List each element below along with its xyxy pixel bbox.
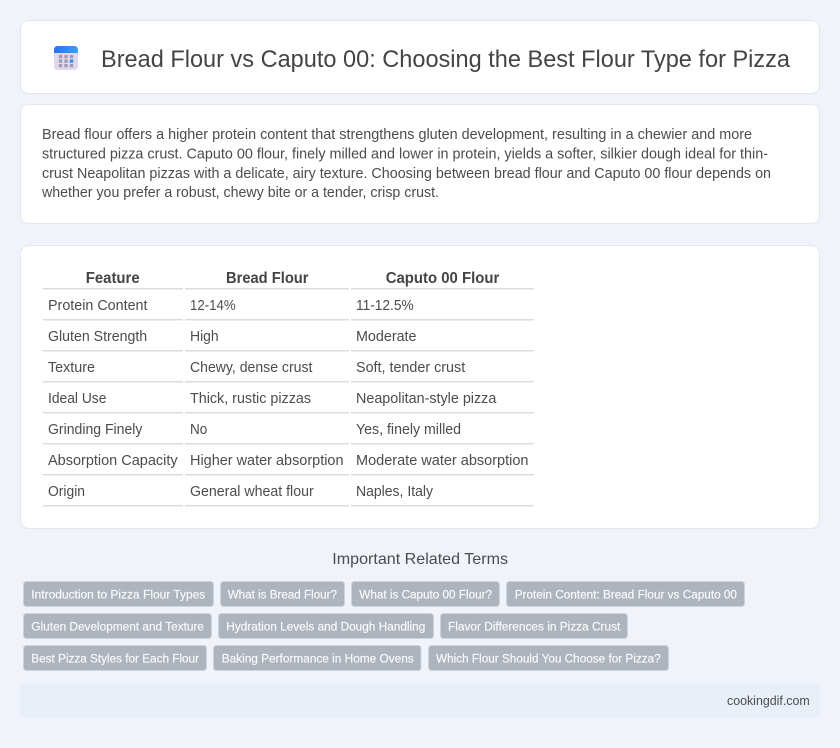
text block: introduction paragraph: [41, 127, 771, 201]
tag: which flour should you choose: [428, 646, 668, 670]
table header: [86, 270, 499, 287]
text block: introduction paragraph: crust Neapolitan pizzas with a delicate, airy texture. Choosing between bread flour and Caputo 00 flour depends on: [42, 166, 771, 182]
icon: calendar: [54, 46, 78, 70]
table row: ideal use: [48, 391, 496, 407]
text block: introduction paragraph: whether you prefer a robust, chewy bite or a tender, crisp crust.: [41, 185, 439, 201]
table row: texture: [48, 360, 465, 376]
panel: title card: [20, 20, 820, 94]
table row: gluten strength: High: [190, 329, 219, 345]
text block: introduction paragraph: structured pizza crust. Caputo 00 flour, finely milled and lower in protein, yields a softer, silkier dough ideal for thin-: [42, 146, 768, 162]
tag: baking performance in home ovens: Baking Performance in Home Ovens: [222, 651, 414, 665]
text block: introduction paragraph: Bread flour offers a higher protein content that strengthens gluten development, resulting in a chewier and more: [42, 127, 752, 143]
table row: absorption capacity: Moderate water absorption: [356, 453, 528, 469]
table row: origin: General wheat flour: [190, 484, 314, 500]
table row: origin: Origin: [48, 484, 85, 500]
panel: comparison table: [20, 246, 820, 528]
table header: Caputo 00 Flour: [386, 270, 499, 287]
table header: Feature: [86, 270, 140, 287]
tag: hydration levels and dough handling: Hydration Levels and Dough Handling: [226, 619, 425, 633]
tag: introduction to pizza flour types: [24, 582, 214, 606]
tag: which flour should you choose: Which Flour Should You Choose for Pizza?: [436, 651, 661, 665]
table row: texture: Soft, tender crust: [356, 360, 465, 376]
table row: grinding finely: No: [190, 422, 207, 438]
table row: ideal use: Thick, rustic pizzas: [190, 391, 311, 407]
table row: texture: Texture: [48, 360, 95, 376]
tag: what is caputo 00 flour: What is Caputo 00 Flour?: [359, 587, 492, 601]
tag: baking performance in home ovens: [214, 646, 421, 670]
tag: best pizza styles for each flour: [24, 646, 206, 670]
tag: what is bread flour: What is Bread Flour?: [228, 587, 337, 601]
table row: protein content: 11-12.5%: [356, 298, 414, 314]
table row: gluten strength: [48, 329, 416, 345]
tag: hydration levels and dough handling: [218, 614, 434, 638]
footer: [20, 684, 820, 718]
tag: what is bread flour: [220, 582, 344, 606]
tag: best pizza styles for each flour: Best Pizza Styles for Each Flour: [31, 651, 199, 665]
table row: protein content: Protein Content: [48, 298, 148, 314]
heading: important related terms: Important Related Terms: [332, 551, 508, 568]
tag: what is caputo 00 flour: [352, 582, 500, 606]
table row: absorption capacity: Absorption Capacity: [48, 453, 178, 469]
table row: grinding finely: Yes, finely milled: [356, 422, 461, 438]
table row: protein content: [48, 298, 414, 314]
table row: gluten strength: Gluten Strength: [48, 329, 147, 345]
table row: protein content: 12-14%: [190, 298, 236, 314]
tag: gluten development and texture: [24, 614, 212, 638]
table row: ideal use: Ideal Use: [48, 391, 106, 407]
related terms tags: [24, 582, 744, 670]
table row: absorption capacity: [48, 453, 528, 469]
table row: ideal use: Neapolitan-style pizza: [356, 391, 496, 407]
tag: flavor differences in pizza crust: [440, 614, 628, 638]
tag: flavor differences in pizza crust: Flavor Differences in Pizza Crust: [448, 619, 621, 633]
table row: grinding finely: [48, 422, 461, 438]
table row: absorption capacity: Higher water absorption: [190, 453, 344, 469]
table row: gluten strength: Moderate: [356, 329, 416, 345]
title: Bread Flour vs Caputo 00: Choosing the Best Flour Type for Pizza: [101, 46, 791, 73]
tag: introduction to pizza flour types: Introduction to Pizza Flour Types: [31, 587, 205, 601]
tag: protein content: [506, 582, 744, 606]
tag: protein content: Protein Content: Bread Flour vs Caputo 00: [515, 587, 737, 601]
panel: introduction: [20, 104, 820, 224]
table row: texture: Chewy, dense crust: [190, 360, 312, 376]
table header: Bread Flour: [226, 270, 308, 287]
footer source text: cookingdif.com: [727, 693, 810, 708]
table row: origin: [48, 484, 434, 500]
table row: grinding finely: Grinding Finely: [48, 422, 143, 438]
tag: gluten development and texture: Gluten Development and Texture: [31, 619, 204, 633]
table row: origin: Naples, Italy: [356, 484, 434, 500]
